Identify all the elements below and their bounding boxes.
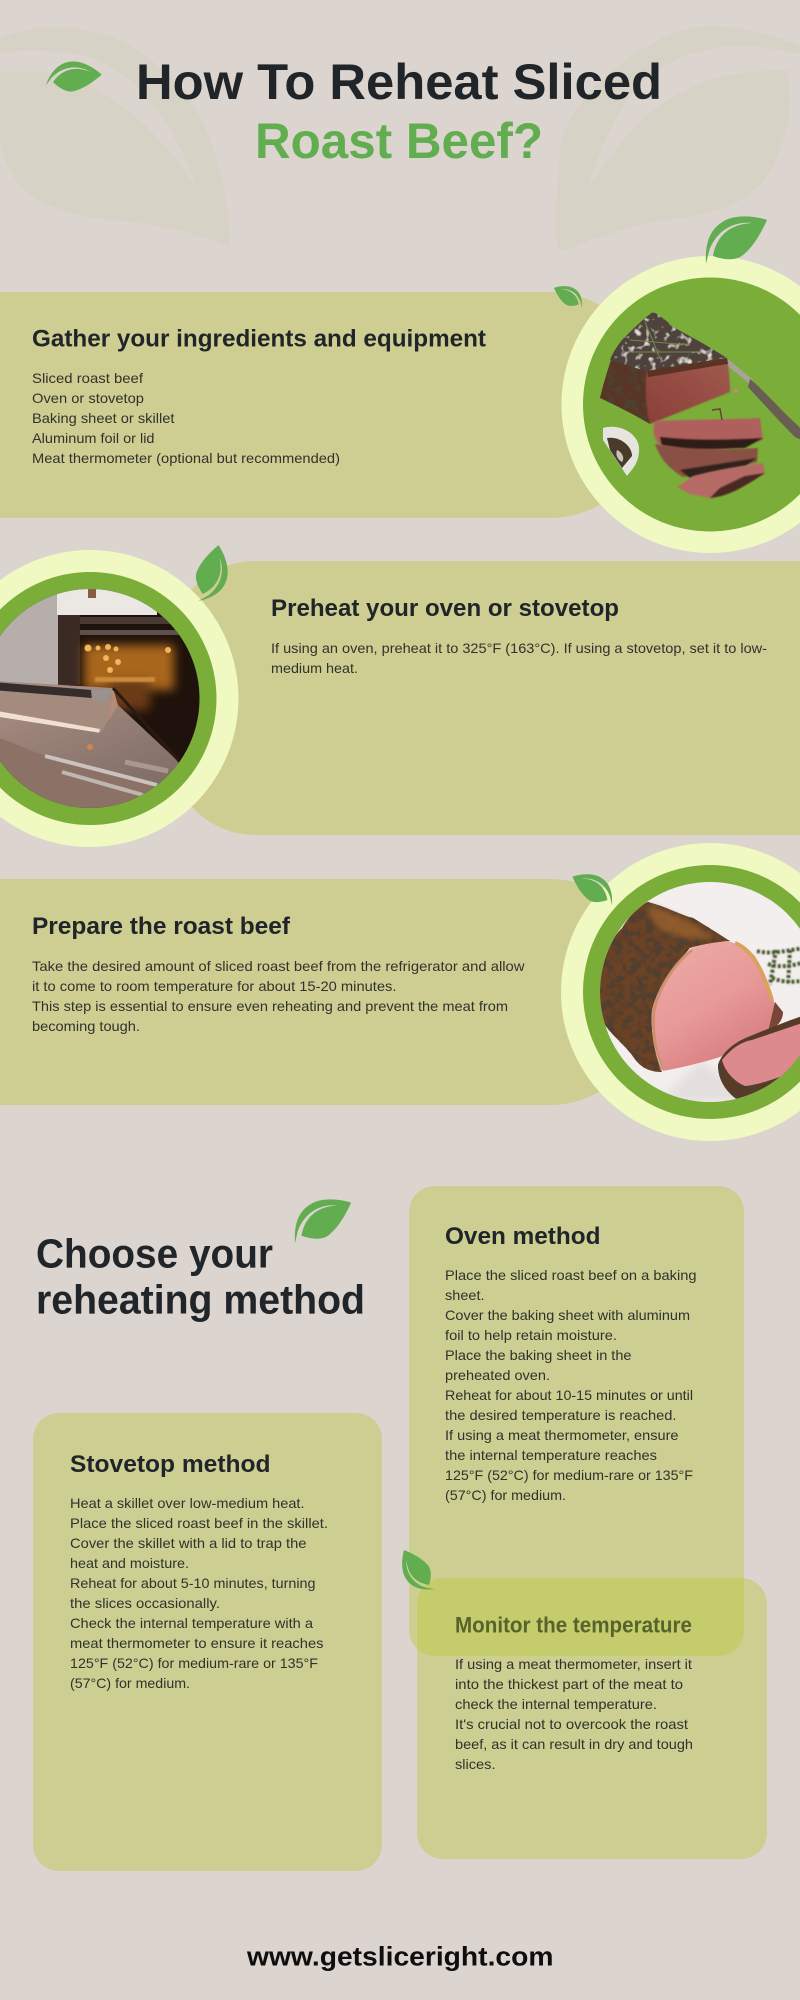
text block: prepare body: it to come to room temperature for about 15-20 minutes. <box>32 978 396 994</box>
text block: prepare body <box>32 958 525 1034</box>
photo circle: sliced roast beef <box>562 256 800 553</box>
text block: monitor body: check the internal temperature. <box>455 1696 657 1712</box>
text block: stovetop steps: Check the internal temperature with a <box>70 1615 313 1631</box>
heading: choose your reheating method <box>36 1230 365 1322</box>
text block: oven steps: preheated oven. <box>445 1367 550 1383</box>
text block: stovetop steps: meat thermometer to ensure it reaches <box>70 1635 324 1651</box>
text block: preheat body: medium heat. <box>271 660 358 676</box>
text block: stovetop steps: Reheat for about 5-10 minutes, turning <box>70 1575 316 1591</box>
panel: preheat <box>170 561 800 835</box>
text block: stovetop steps: heat and moisture. <box>70 1555 189 1571</box>
decorative background leaf right <box>556 26 800 250</box>
text block: ingredient list <box>32 370 340 466</box>
text block: oven steps: Reheat for about 10-15 minutes or until <box>445 1387 693 1403</box>
icon: leaf above photo three <box>572 874 612 905</box>
heading: prepare: Prepare the roast beef <box>32 913 291 940</box>
title: How To Reheat Sliced <box>136 54 662 110</box>
text block: preheat body: If using an oven, preheat it to 325°F (163°C). If using a stovetop, set it to low- <box>271 640 767 656</box>
text block: stovetop steps: the slices occasionally. <box>70 1595 220 1611</box>
text block: stovetop steps: Place the sliced roast beef in the skillet. <box>70 1515 328 1531</box>
text block: oven steps: (57°C) for medium. <box>445 1487 566 1503</box>
icon: leaf by monitor panel <box>402 1549 435 1590</box>
panel: prepare the roast beef <box>0 879 650 1105</box>
text block: oven steps <box>445 1267 696 1503</box>
panel: gather ingredients <box>0 292 650 518</box>
text block: oven steps: Place the baking sheet in the <box>445 1347 632 1363</box>
text block: stovetop steps: (57°C) for medium. <box>70 1675 190 1691</box>
icon: small leaf on panel one <box>554 286 582 308</box>
panel: stovetop method <box>33 1413 382 1871</box>
text block: oven steps: Place the sliced roast beef on a baking <box>445 1267 696 1283</box>
icon: title leaf <box>46 53 103 105</box>
text block: stovetop steps: Heat a skillet over low-medium heat. <box>70 1495 304 1511</box>
panel: oven method <box>409 1186 744 1656</box>
text block: monitor body: If using a meat thermometer, insert it <box>455 1656 692 1672</box>
text block: ingredient list: Sliced roast beef <box>32 370 143 386</box>
text block: monitor body: It's crucial not to overcook the roast <box>455 1716 688 1732</box>
text block: prepare body: This step is essential to ensure even reheating and prevent the meat from <box>32 998 508 1014</box>
text block: stovetop steps: Cover the skillet with a lid to trap the <box>70 1535 307 1551</box>
photo circle: oven <box>0 550 238 847</box>
text block: monitor body <box>455 1656 693 1772</box>
text block: ingredient list: Meat thermometer (optional but recommended) <box>32 450 340 466</box>
heading: stovetop: Stovetop method <box>70 1451 270 1478</box>
heading: choose your reheating method: reheating method <box>36 1276 365 1322</box>
text block: stovetop steps <box>70 1495 328 1691</box>
text block: oven steps: sheet. <box>445 1287 484 1303</box>
title: Roast Beef? <box>255 113 543 169</box>
text block: ingredient list: Aluminum foil or lid <box>32 430 154 446</box>
photo circle: roast beef <box>561 843 800 1141</box>
heading: gather: Gather your ingredients and equipment <box>32 326 486 352</box>
text block: prepare body: Take the desired amount of sliced roast beef from the refrigerator and allow <box>32 958 525 974</box>
icon: leaf above photo one <box>706 216 767 264</box>
text block: oven steps: the desired temperature is reached. <box>445 1407 676 1423</box>
decorative background leaf left <box>0 27 230 245</box>
icon: leaf by choose heading <box>295 1199 351 1243</box>
text block: oven steps: 125°F (52°C) for medium-rare or 135°F <box>445 1467 693 1483</box>
heading: oven: Oven method <box>445 1223 600 1250</box>
text block: monitor body: slices. <box>455 1756 496 1772</box>
text block: oven steps: the internal temperature reaches <box>445 1447 657 1463</box>
text block: oven steps: Cover the baking sheet with aluminum <box>445 1307 690 1323</box>
heading: preheat: Preheat your oven or stovetop <box>271 595 619 622</box>
heading: choose your reheating method: Choose your <box>36 1230 273 1276</box>
text block: monitor body: into the thickest part of the meat to <box>455 1676 683 1692</box>
panel: monitor the temperature <box>417 1578 767 1859</box>
text block: oven steps: foil to help retain moisture. <box>445 1327 617 1343</box>
title <box>136 54 662 169</box>
footer url: www.getsliceright.com <box>246 1942 553 1972</box>
text block: ingredient list: Oven or stovetop <box>32 390 144 406</box>
text block: prepare body: becoming tough. <box>32 1018 140 1034</box>
icon: leaf above photo two <box>185 544 235 601</box>
heading: monitor: Monitor the temperature <box>455 1612 692 1638</box>
text block: preheat body <box>271 640 767 676</box>
text block: ingredient list: Baking sheet or skillet <box>32 410 175 426</box>
text block: oven steps: If using a meat thermometer, ensure <box>445 1427 679 1443</box>
text block: stovetop steps: 125°F (52°C) for medium-rare or 135°F <box>70 1655 318 1671</box>
text block: monitor body: beef, as it can result in dry and tough <box>455 1736 693 1752</box>
